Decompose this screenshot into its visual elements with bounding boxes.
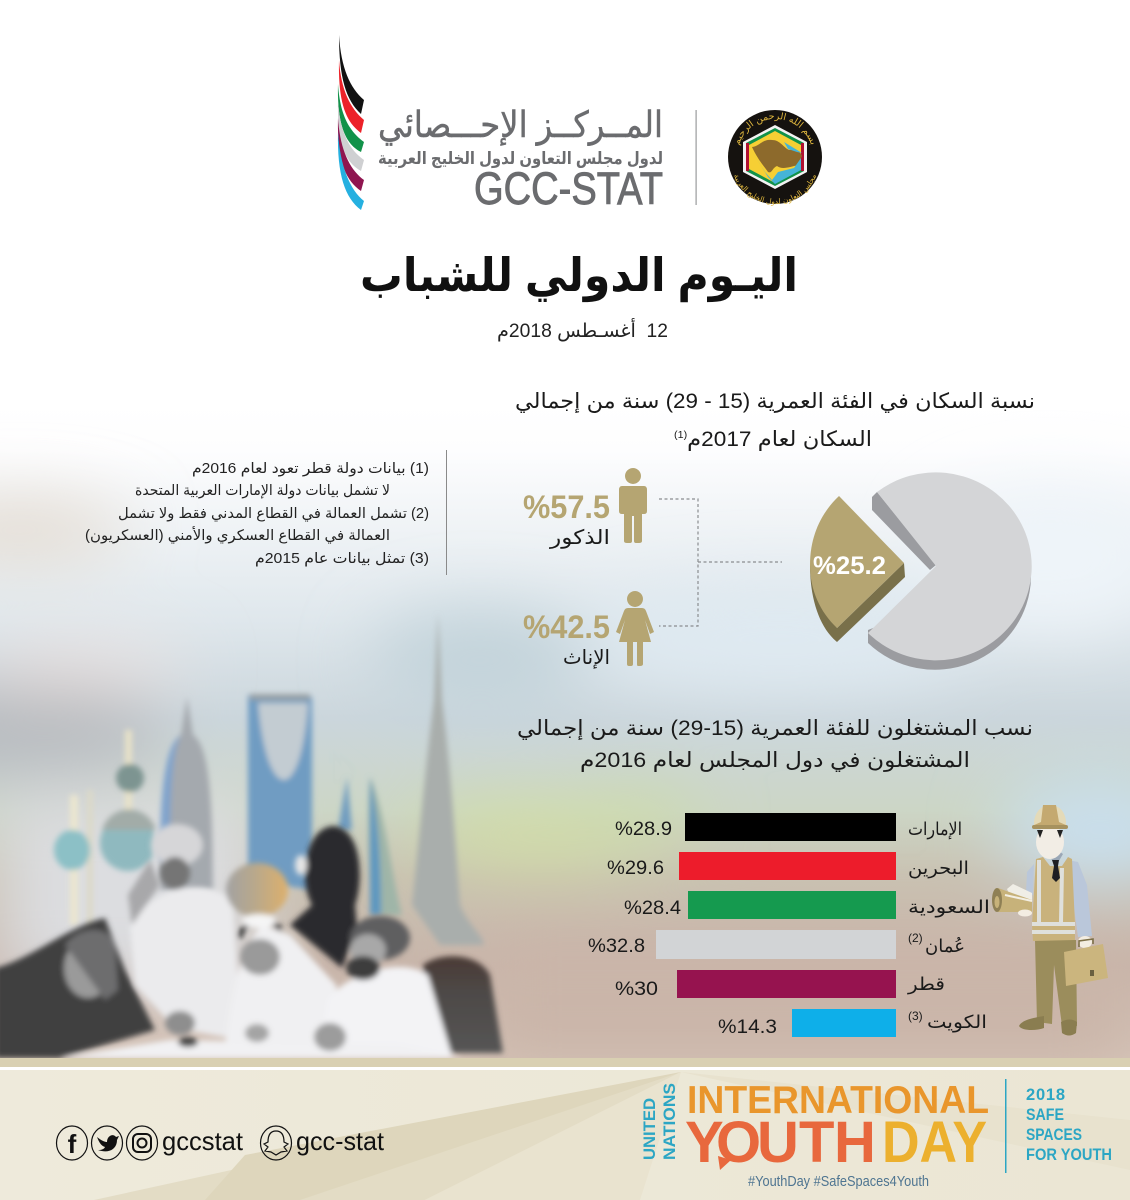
footnotes: العمالة في القطاع العسكري والأمني (العسكريون) — [85, 526, 390, 544]
social media handles — [56, 1126, 385, 1160]
bar: Oman — [588, 930, 965, 959]
male stat: الذكور — [549, 527, 610, 549]
bar: UAE: %28.9 — [615, 818, 672, 840]
seated man centre — [225, 925, 340, 1052]
soft colour haze — [0, 490, 1130, 1065]
bar: Qatar: %30 — [615, 978, 658, 1000]
bar: Bahrain: البحرين — [908, 858, 969, 879]
United Nations vertical text: NATIONS — [661, 1083, 679, 1160]
connector dotted lines — [659, 499, 782, 626]
briefcase — [1079, 939, 1093, 947]
bar: Saudi Arabia — [624, 891, 990, 919]
arms — [1068, 860, 1092, 937]
man in dark suit — [0, 918, 155, 1058]
heading: employment share: المشتغلون في دول المجلس لعام 2016م — [580, 749, 970, 772]
icon: engineer with briefcase and plans — [992, 805, 1108, 1036]
bottom tan band — [0, 1058, 1130, 1067]
male stat — [523, 468, 647, 549]
icon: instagram — [126, 1126, 158, 1160]
blurred people around a table — [0, 824, 503, 1058]
bar: Oman: %32.8 — [588, 935, 645, 957]
footnotes: (1) بيانات دولة قطر تعود لعام 2016م — [192, 461, 429, 477]
bar: Kuwait: %14.3 — [718, 1016, 777, 1038]
female stat — [523, 591, 654, 669]
pie chart — [810, 472, 1032, 670]
divider — [1005, 1079, 1006, 1173]
female stat: %42.5 — [523, 609, 610, 645]
background: blurred skyline and people — [0, 405, 1130, 1065]
heading: population share — [515, 390, 1035, 451]
International: INTERNATIONAL — [687, 1079, 989, 1122]
table and hands — [60, 1040, 460, 1058]
plans — [1007, 884, 1032, 905]
speech bubble tail — [718, 1156, 731, 1170]
heading: employment share — [517, 717, 1033, 772]
bar chart: employment by country — [588, 813, 990, 1038]
footer panel — [0, 1070, 1130, 1200]
handle: gcc-stat: gcc-stat — [296, 1126, 385, 1156]
bar: Oman: (2) — [908, 931, 923, 945]
pie: gold slice — [810, 496, 905, 642]
theme text: SPACES — [1026, 1126, 1082, 1144]
theme text: 2018 — [1026, 1086, 1065, 1104]
chair — [423, 956, 503, 1053]
bar: UAE: الإمارات — [908, 819, 962, 839]
logo text — [378, 104, 663, 214]
theme text: FOR YOUTH — [1026, 1146, 1112, 1164]
bar: Qatar — [615, 970, 945, 1000]
icon: facebook: f — [68, 1129, 77, 1159]
heading: population share: السكان لعام 2017م — [687, 428, 863, 451]
female stat: الإناث — [563, 647, 610, 669]
icon: woman — [616, 591, 654, 666]
woman — [290, 826, 360, 968]
GCC emblem: بسم الله الرحمن الرحيم — [737, 112, 814, 146]
Day: DAY — [882, 1110, 987, 1175]
GCC emblem — [728, 110, 822, 206]
theme text — [1026, 1086, 1112, 1164]
footnotes: لا تشمل بيانات دولة الإمارات العربية المتحدة — [135, 483, 390, 499]
bar: Qatar: قطر — [907, 974, 945, 995]
bar: Kuwait — [718, 1009, 987, 1038]
bar: Bahrain — [607, 852, 969, 880]
Youth: YOUTH — [685, 1110, 876, 1175]
pie: grey remainder — [868, 472, 1032, 670]
GCC emblem: مجلس التعاون لدول الخليج العربية — [734, 174, 816, 206]
title: اليـوم الدولي للشباب — [360, 249, 798, 302]
footnotes: (3) تمثل بيانات عام 2015م — [255, 551, 429, 567]
blurred towers — [160, 613, 484, 945]
International Youth Day logo — [641, 1079, 1112, 1190]
handle: gccstat: gccstat — [162, 1126, 244, 1156]
logo: GCC-STAT ribbons — [338, 35, 364, 210]
icon: man — [619, 468, 647, 543]
seated man right — [320, 967, 452, 1056]
head — [1036, 825, 1064, 859]
vest — [1032, 857, 1075, 941]
male stat: %57.5 — [523, 489, 610, 525]
logo divider — [696, 110, 697, 205]
icon: facebook — [56, 1126, 88, 1160]
standing man — [130, 888, 242, 1040]
bar: Saudi Arabia: السعودية — [908, 897, 990, 918]
date: 12 أغسـطس 2018م — [497, 318, 668, 342]
footnotes — [85, 450, 447, 575]
icon: snapchat — [260, 1126, 292, 1160]
blurred Kuwait Towers — [54, 730, 156, 930]
bar: Saudi Arabia: %28.4 — [624, 897, 681, 919]
heading: population share: (1) — [674, 430, 687, 441]
heading: employment share: نسب المشتغلون للفئة العمرية (15-29) سنة من إجمالي — [517, 717, 1033, 741]
icon: twitter — [92, 1126, 122, 1160]
heading: population share: نسبة السكان في الفئة العمرية (15 - 29) سنة من إجمالي — [515, 390, 1035, 414]
logo text: المــركــز الإحـــصائي — [378, 104, 663, 146]
legs and shoes — [1035, 940, 1077, 1026]
footnotes: (2) تشمل العمالة في القطاع المدني فقط ولا تشمل — [118, 506, 429, 522]
bar: Oman: عُمان — [925, 936, 965, 956]
United Nations vertical text: UNITED — [641, 1098, 659, 1160]
bar: UAE — [615, 813, 962, 841]
bar: Kuwait: (3) — [908, 1009, 923, 1023]
logo text: لدول مجلس التعاون لدول الخليج العربية — [378, 149, 663, 169]
bar: Kuwait: الكويت — [927, 1012, 987, 1033]
pie: gold slice: %25.2 — [813, 552, 886, 580]
United Nations vertical text — [641, 1083, 679, 1160]
hashtags: #YouthDay #SafeSpaces4Youth — [748, 1174, 929, 1190]
bald man — [226, 863, 288, 917]
bar: Bahrain: %29.6 — [607, 857, 664, 879]
theme text: SAFE — [1026, 1106, 1064, 1124]
logo text: GCC-STAT — [474, 163, 663, 214]
